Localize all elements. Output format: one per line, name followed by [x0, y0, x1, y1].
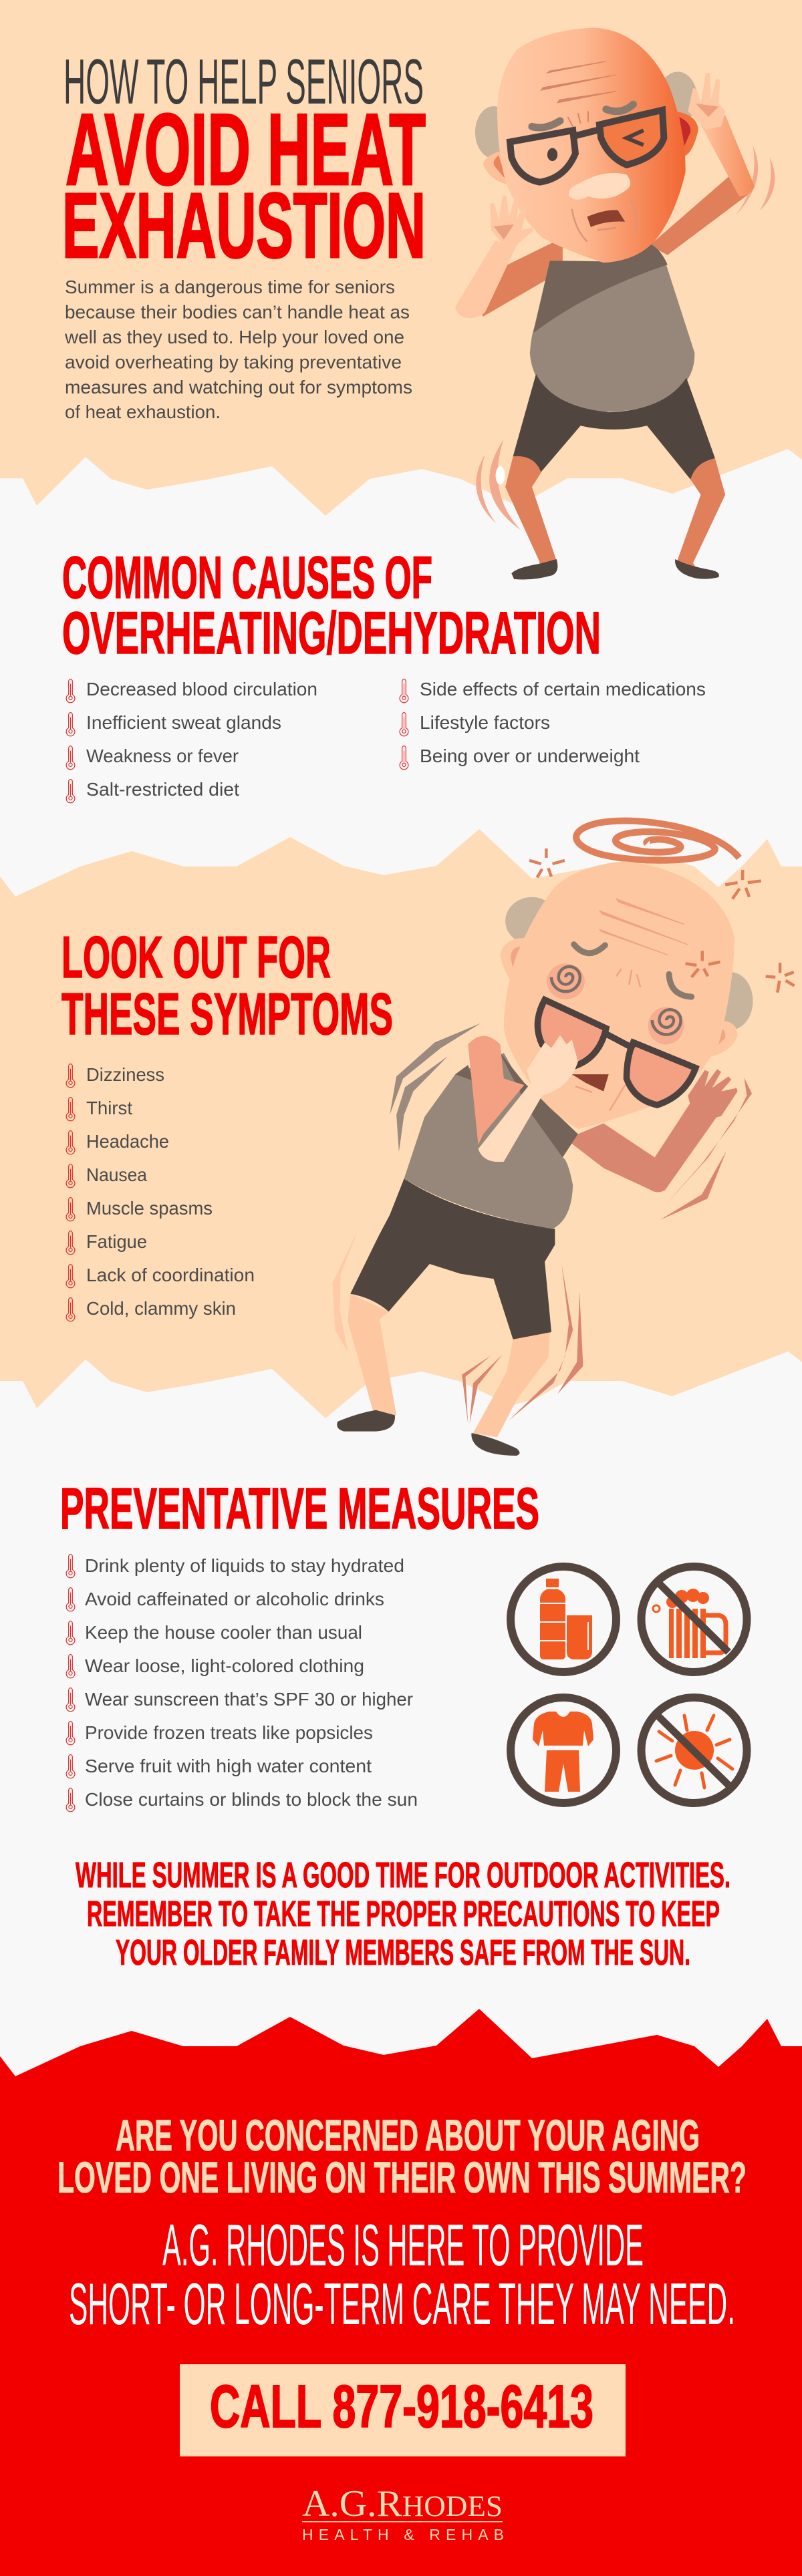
forehead star — [686, 951, 720, 977]
right lens tint — [599, 110, 664, 165]
motion lines — [476, 146, 775, 530]
call to action: CALL 877-918-6413 — [210, 2374, 593, 2440]
shirt shadow — [455, 1051, 578, 1158]
icon: no alcohol — [642, 1567, 747, 1672]
item: Being over or underweight — [420, 746, 640, 766]
item: Salt-restricted diet — [86, 779, 239, 800]
forearm right — [700, 115, 755, 196]
ears — [500, 938, 529, 981]
icon: loose clothing — [511, 1698, 616, 1803]
glasses — [537, 1000, 696, 1105]
text: HOW TO HELP SENIORS — [63, 46, 424, 118]
forehead wrinkles — [541, 61, 616, 103]
shirt shadow — [533, 242, 668, 333]
item: Fatigue — [86, 1231, 147, 1252]
forearm left — [455, 241, 517, 318]
motion lines: legs — [332, 1230, 358, 1352]
heading: common causes: COMMON CAUSES OF — [62, 544, 432, 611]
palm left — [494, 224, 514, 240]
item — [66, 1064, 164, 1088]
shorts — [350, 1178, 555, 1339]
heading: symptoms: THESE SYMPTOMS — [61, 981, 393, 1047]
upper arms — [473, 176, 748, 317]
hair — [475, 106, 512, 158]
glasses bridge — [606, 1034, 634, 1049]
logo: HEALTH & REHAB — [302, 2526, 504, 2543]
hand right — [688, 73, 725, 130]
arm behind — [570, 1104, 716, 1192]
item: Close curtains or blinds to block the sun — [85, 1789, 418, 1810]
head — [497, 27, 686, 263]
item: Serve fruit with high water content — [85, 1756, 372, 1776]
item: Cold, clammy skin — [86, 1298, 236, 1319]
dizzy stars — [529, 848, 795, 993]
hand left — [490, 196, 533, 247]
torso — [530, 242, 694, 412]
item — [66, 1098, 132, 1121]
spiral above head — [576, 821, 739, 860]
item: Lifestyle factors — [420, 712, 550, 733]
top cream panel — [0, 0, 802, 516]
symptoms cream panel — [0, 829, 802, 1418]
heading: common causes — [62, 544, 601, 666]
legs — [505, 456, 725, 571]
brows — [574, 945, 692, 997]
legs — [348, 1294, 396, 1416]
hand behind — [688, 1070, 738, 1119]
item: Avoid caffeinated or alcoholic drinks — [85, 1589, 384, 1609]
footer statement — [69, 2212, 735, 2337]
item: Nausea — [86, 1164, 147, 1185]
icon: water bottle and glass — [511, 1567, 616, 1672]
intro paragraph: measures and watching out for symptoms — [65, 377, 412, 397]
red footer panel — [0, 2009, 802, 2576]
glasses — [510, 110, 664, 182]
spiral eyes — [551, 967, 681, 1035]
eye halo — [547, 963, 585, 999]
item: Wear sunscreen that’s SPF 30 or higher — [85, 1689, 413, 1710]
nose — [569, 173, 630, 200]
torso — [404, 1053, 573, 1229]
item: Drink plenty of liquids to stay hydrated — [85, 1555, 404, 1576]
mouth — [572, 1074, 609, 1092]
icon: avoid sun — [642, 1698, 747, 1803]
item: Muscle spasms — [86, 1198, 213, 1219]
illustration: senior overheating, standing — [455, 27, 775, 580]
wrinkles between brows — [616, 969, 640, 987]
symptoms list — [66, 1064, 255, 1321]
shorts — [513, 374, 715, 480]
illustration: dizzy senior, bent over — [332, 821, 795, 1456]
forehead wrinkles — [599, 899, 688, 955]
item: Thirst — [86, 1098, 132, 1118]
item: Dizziness — [86, 1064, 164, 1085]
title — [62, 46, 426, 277]
causes list — [66, 679, 706, 803]
item — [66, 1231, 147, 1255]
item: Headache — [86, 1131, 169, 1152]
item: Side effects of certain medications — [420, 679, 706, 699]
item: Decreased blood circulation — [86, 679, 317, 699]
item — [66, 1164, 147, 1188]
mouth — [587, 210, 625, 227]
upper arm — [468, 1036, 524, 1144]
intro paragraph: well as they used to. Help your loved one — [64, 327, 404, 347]
intro paragraph — [64, 277, 412, 422]
brow wrinkles — [567, 111, 588, 126]
heading: symptoms — [61, 924, 393, 1047]
intro paragraph: of heat exhaustion. — [65, 401, 221, 422]
eyes — [547, 148, 557, 161]
intro paragraph: Summer is a dangerous time for seniors — [65, 277, 395, 297]
item: Lack of coordination — [86, 1265, 255, 1285]
footer question — [57, 2110, 747, 2202]
cheek line — [575, 1085, 625, 1110]
shoes — [511, 559, 719, 580]
item: Keep the house cooler than usual — [85, 1622, 362, 1643]
hair — [505, 897, 559, 945]
item: Wear loose, light-colored clothing — [85, 1655, 364, 1676]
item: Inefficient sweat glands — [86, 712, 281, 733]
logo: A.G.RHODES — [302, 2483, 503, 2525]
cheek lines — [572, 200, 636, 242]
title line: exhaustion: EXHAUSTION — [62, 174, 426, 277]
head — [504, 861, 734, 1129]
shoes — [337, 1410, 520, 1456]
item: Weakness or fever — [86, 746, 239, 766]
logo — [302, 2483, 504, 2543]
prevention list — [66, 1555, 418, 1812]
intro paragraph: avoid overheating by taking preventative — [65, 351, 402, 373]
lip line — [597, 228, 616, 230]
eyebrows — [532, 104, 633, 128]
heading: symptoms: LOOK OUT FOR — [61, 924, 331, 990]
title line: avoid heat: AVOID HEAT — [65, 93, 426, 206]
item: Provide frozen treats like popsicles — [85, 1722, 373, 1743]
palm right — [696, 104, 718, 117]
white droplet — [496, 466, 505, 485]
intro paragraph: because their bodies can’t handle heat as — [65, 302, 410, 322]
ears — [483, 152, 511, 185]
forearm and hand — [479, 1035, 578, 1162]
motion lines: upper left — [390, 1023, 481, 1152]
call to action — [180, 2364, 626, 2456]
closing message — [76, 1855, 730, 1973]
item — [66, 1131, 169, 1154]
motion lines: right arm — [660, 1078, 752, 1220]
